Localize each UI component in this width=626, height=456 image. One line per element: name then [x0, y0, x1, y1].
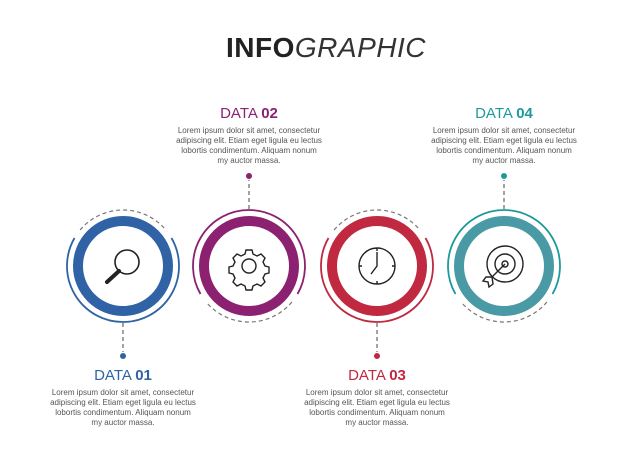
icon: target	[483, 246, 523, 287]
text: data 01: my auctor massa.	[91, 418, 155, 427]
text: data 03: DATA 03	[348, 367, 406, 384]
text: data 02: DATA 02	[220, 105, 278, 122]
text: data 04: my auctor massa.	[472, 156, 536, 165]
text: data 01: adipiscing elit. Etiam eget ligula eu lectus	[50, 398, 196, 407]
connector	[248, 180, 250, 209]
text: data 02: adipiscing elit. Etiam eget ligula eu lectus	[176, 136, 322, 145]
text: data 03	[304, 367, 450, 427]
text: data 01: Lorem ipsum dolor sit amet, consectetur	[52, 388, 194, 397]
text: data 03: lobortis condimentum. Aliquam nonum	[309, 408, 445, 417]
connector	[122, 323, 124, 352]
text: data 03: adipiscing elit. Etiam eget ligula eu lectus	[304, 398, 450, 407]
connector	[376, 323, 378, 352]
text: data 04	[431, 105, 577, 165]
text: data 01	[50, 367, 196, 427]
text: data 02: my auctor massa.	[217, 156, 281, 165]
icon: magnifier	[107, 250, 139, 282]
ring	[332, 221, 422, 311]
text: data 03: Lorem ipsum dolor sit amet, consectetur	[306, 388, 448, 397]
text: data 04: DATA 04	[475, 105, 534, 122]
text: data 01: lobortis condimentum. Aliquam nonum	[55, 408, 191, 417]
text: data 04: Lorem ipsum dolor sit amet, consectetur	[433, 126, 575, 135]
text: data 02: Lorem ipsum dolor sit amet, consectetur	[178, 126, 320, 135]
text: data 04: adipiscing elit. Etiam eget ligula eu lectus	[431, 136, 577, 145]
text: data 03: my auctor massa.	[345, 418, 409, 427]
connector	[503, 180, 505, 209]
step 2: purple	[193, 173, 305, 322]
step 1: blue	[67, 210, 179, 359]
ring	[459, 221, 549, 311]
ring	[78, 221, 168, 311]
step 4: teal	[448, 173, 560, 322]
text: data 04: lobortis condimentum. Aliquam nonum	[436, 146, 572, 155]
icon: gear	[229, 250, 269, 290]
step 3: red	[321, 210, 433, 359]
ring	[204, 221, 294, 311]
text: data 02	[176, 105, 322, 165]
title: INFOGRAPHIC	[226, 32, 426, 63]
text: data 02: lobortis condimentum. Aliquam nonum	[181, 146, 317, 155]
text: data 01: DATA 01	[94, 367, 152, 384]
icon: clock	[359, 248, 395, 284]
